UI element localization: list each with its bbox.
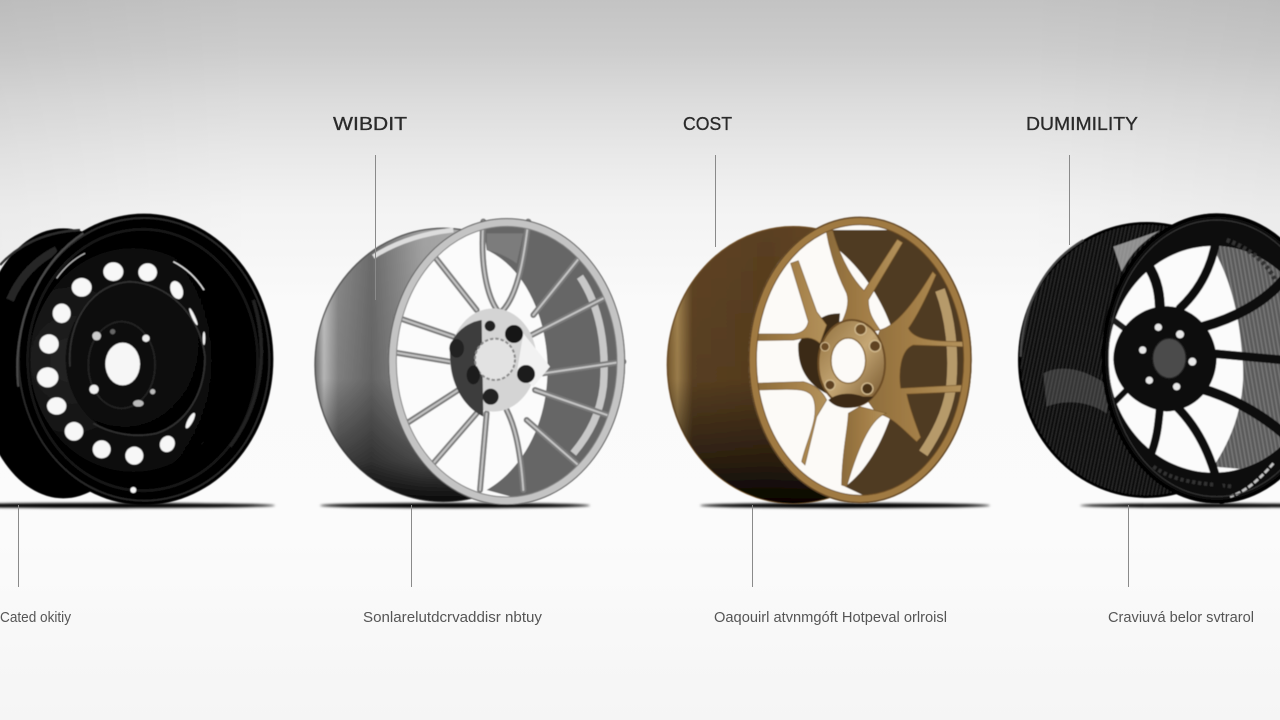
wheel rim	[749, 217, 971, 503]
wheel vent holes	[37, 262, 205, 493]
wheel hub	[1113, 306, 1217, 412]
wheel: silver alloy	[315, 218, 627, 505]
wheel: carbon fibre	[1019, 213, 1280, 503]
wheel rim	[389, 219, 625, 505]
caption: alloy: Sonlarelutdcrvaddisr nbtuy	[363, 609, 542, 626]
ground shadows	[0, 503, 1280, 508]
wheel barrel	[667, 227, 919, 503]
wheel spokes	[1113, 220, 1280, 500]
wheel barrel	[315, 228, 572, 502]
leader lines	[18, 155, 1128, 587]
wheel face	[396, 226, 618, 497]
wheel spokes	[753, 230, 963, 487]
wheel face	[1100, 213, 1280, 503]
wheel: bronze	[667, 217, 977, 503]
caption: carbon: Craviuvá belor svtrarol	[1108, 609, 1254, 626]
wheel barrel	[1019, 223, 1274, 497]
wheel spokes	[390, 222, 623, 490]
wheel barrel	[0, 228, 150, 498]
heading: durability: DUMIMILITY	[1026, 114, 1138, 134]
heading: cost: COST	[683, 114, 732, 134]
wheel hub	[88, 322, 155, 408]
wheel hub	[818, 320, 885, 408]
wheel rim	[1103, 215, 1280, 502]
wheel rim	[15, 214, 273, 505]
wheel face	[748, 217, 977, 503]
caption: steel: Cated okitiy	[0, 609, 71, 626]
wheel: black steel	[0, 214, 273, 505]
wheel disc	[30, 248, 237, 472]
heading: weight: WIBDIT	[333, 114, 407, 134]
wheel hub	[449, 308, 550, 417]
caption: bronze: Oaqouirl atvnmgóft Hotpeval orlroisl	[714, 609, 947, 626]
